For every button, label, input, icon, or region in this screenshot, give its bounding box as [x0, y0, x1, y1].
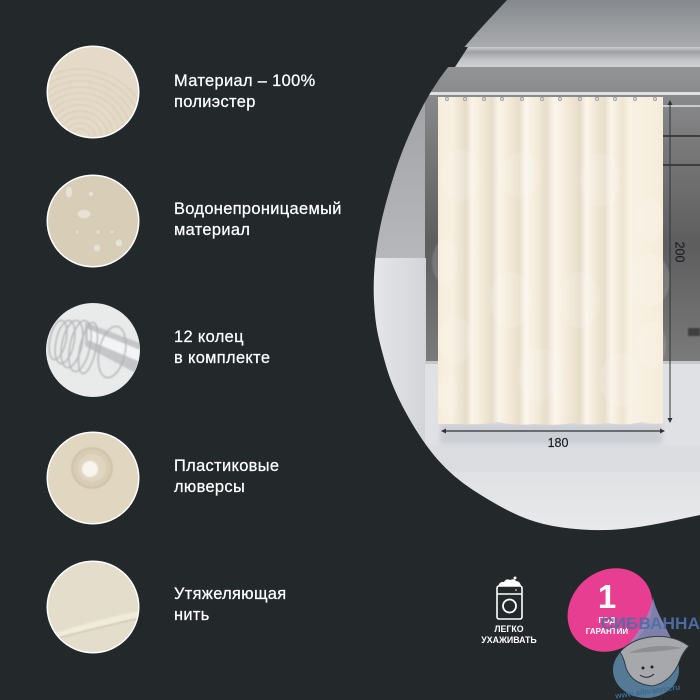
curtain rings: [445, 97, 657, 101]
back wall: [425, 67, 700, 364]
curtain: [432, 97, 670, 425]
watermark: drop: [622, 597, 672, 652]
dimension label: 200: 200: [673, 242, 687, 262]
text: easy care: ЛЕГКО: [494, 624, 524, 634]
watermark: url: www.sibvanna.ru: [614, 682, 681, 700]
text: rings: в комплекте: [174, 349, 270, 367]
badge: pink guarantee shape: [550, 551, 670, 669]
text: grommets: [174, 457, 279, 496]
ceiling: [360, 0, 700, 47]
watermark: tub logo: [613, 636, 689, 698]
photo: plastic grommet: [46, 432, 140, 524]
text: waterproof: материал: [174, 221, 250, 239]
text: material: Материал – 100%: [174, 72, 316, 90]
text: year: ГОД: [598, 615, 616, 625]
text: rings: [174, 328, 270, 367]
dimension arrow: height: [668, 100, 672, 423]
text: waterproof: Водонепроницаемый: [174, 200, 342, 218]
photo: fabric texture: [46, 46, 140, 138]
icon: washing machine: [497, 576, 522, 619]
back shelf rail: [663, 105, 700, 107]
watermark: brand name: СИБВАННА: [601, 614, 700, 633]
text: grommets: Пластиковые: [174, 457, 279, 475]
text: easy care second line: УХАЖИВАТЬ: [481, 635, 537, 645]
bath front: [425, 364, 700, 448]
text: guarantee: ГАРАНТИИ: [586, 627, 628, 636]
crown moulding: [455, 47, 700, 67]
shower rod: [427, 92, 700, 95]
text: material: [174, 72, 316, 111]
skirting: [360, 445, 700, 473]
photo: rod with rings: [46, 303, 145, 397]
text: weighted thread: нить: [174, 606, 210, 624]
text: weighted thread: [174, 585, 286, 624]
text: rings: 12 колец: [174, 328, 244, 346]
curtain shadow on bath: [440, 424, 662, 444]
photo: water drops: [46, 174, 140, 268]
text: waterproof: [174, 200, 342, 239]
floor: [360, 472, 700, 542]
text: material: полиэстер: [174, 93, 256, 111]
text: guarantee number: 1: [598, 578, 616, 615]
bath rim: [425, 361, 700, 364]
text: grommets: люверсы: [174, 478, 245, 496]
text: weighted thread: Утяжеляющая: [174, 585, 286, 603]
right wall bars: [663, 135, 700, 336]
curtain pebble pattern: [432, 149, 670, 417]
dimension label: 180: 180: [548, 436, 568, 450]
side wall: [360, 40, 460, 364]
side wall tile band: [360, 258, 426, 448]
dimension arrow: width: [441, 428, 665, 434]
photo: weighted hem thread: [46, 560, 140, 654]
